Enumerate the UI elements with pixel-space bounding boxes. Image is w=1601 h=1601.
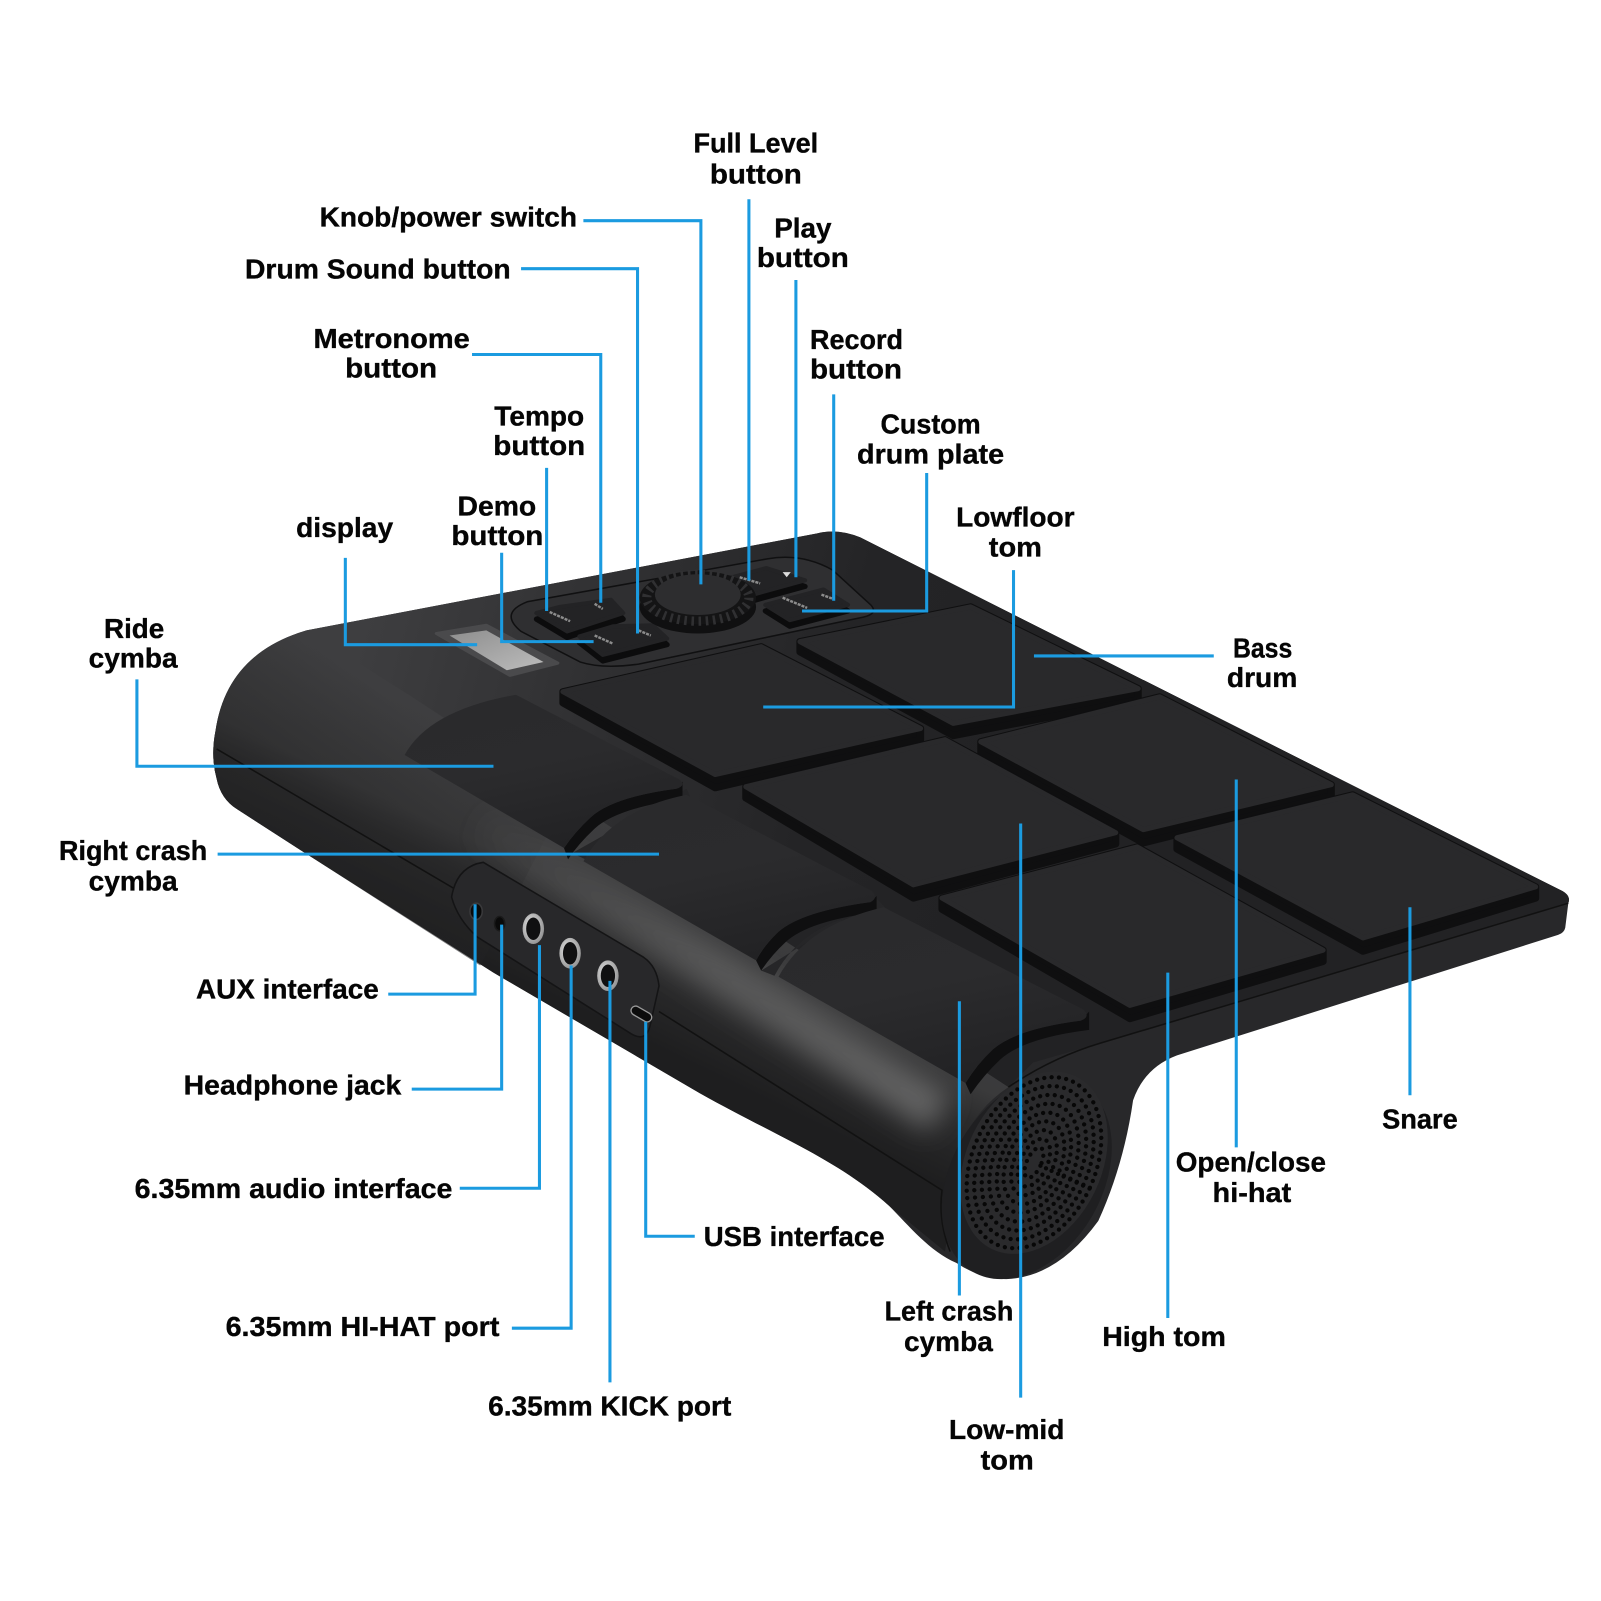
label: low-mid [949, 1414, 1064, 1476]
control panel [511, 557, 874, 666]
line: low-mid [1019, 823, 1022, 1398]
label: tempo: Tempo [494, 401, 584, 432]
label: hi-hat port: 6.35mm HI-HAT port [226, 1311, 499, 1342]
label: demo: button [451, 520, 543, 551]
full level and play button [728, 568, 805, 601]
pad: right crash cymbal [583, 795, 877, 971]
line: left crash [958, 1001, 961, 1296]
label: right crash: cymba [89, 865, 178, 896]
line: knob [583, 221, 701, 584]
line: kick [608, 981, 611, 1382]
leader lines [137, 199, 1410, 1398]
label: ride: cymba [89, 643, 178, 674]
pad: open close hi-hat [981, 697, 1331, 843]
cylinder end shade [213, 630, 572, 966]
label: lowfloor tom: tom [989, 531, 1042, 562]
label: metronome [313, 323, 470, 384]
label: demo: Demo [458, 490, 536, 521]
line: headphone [412, 925, 502, 1089]
label: bass drum [1227, 632, 1297, 693]
label: left crash [885, 1296, 1013, 1357]
labels [59, 128, 1458, 1476]
line: right crash [218, 853, 659, 856]
label: aux: AUX interface [196, 974, 379, 1005]
label: metronome: Metronome [313, 323, 470, 354]
pad: high tom [942, 847, 1323, 1019]
label: record: button [810, 354, 902, 385]
label: kick: 6.35mm KICK port [488, 1391, 731, 1422]
pad: snare [1177, 795, 1536, 951]
label: drum sound: Drum Sound button [245, 253, 511, 284]
line: tempo [545, 468, 548, 611]
label: lowfloor tom [956, 502, 1075, 562]
label: ride: Ride [104, 613, 164, 644]
speaker [907, 1046, 1146, 1310]
label: display: display [296, 512, 394, 543]
label: custom drum plate [857, 409, 1004, 469]
pad: left crash cymbal [779, 907, 1089, 1094]
label: headphone: Headphone jack [184, 1070, 402, 1101]
tempo and metronome buttons [536, 600, 623, 638]
line: ride [137, 679, 493, 766]
line: metronome [472, 355, 601, 603]
label: record: Record [810, 324, 903, 355]
line: display [345, 558, 477, 645]
label: metronome: button [345, 353, 437, 384]
line: lowfloor tom [763, 570, 1014, 707]
label: open close: hi-hat [1213, 1177, 1291, 1208]
body seam [217, 749, 1568, 1252]
label: left crash: cymba [904, 1326, 993, 1357]
label: ride [89, 613, 178, 674]
label: tempo [493, 401, 585, 461]
display [436, 625, 558, 675]
line: demo [502, 553, 594, 642]
label: usb: USB interface [704, 1221, 885, 1252]
label: play: button [757, 242, 849, 273]
label: left crash: Left crash [885, 1296, 1013, 1327]
label: play: Play [774, 213, 832, 244]
highlight band [480, 822, 940, 1114]
line: full level [747, 199, 750, 580]
hi-hat jack [559, 938, 581, 969]
label: knob: Knob/power switch [320, 201, 577, 232]
label: demo [451, 490, 543, 551]
line: play [794, 280, 797, 577]
top plate [307, 532, 1569, 1087]
headphone jack [495, 916, 505, 931]
knob [640, 571, 756, 633]
label: bass drum: Bass [1233, 632, 1292, 663]
line: open close [1235, 780, 1238, 1147]
pad: low-mid tom [746, 740, 1116, 898]
label: custom drum plate: drum plate [857, 438, 1004, 469]
device body silhouette [213, 532, 1569, 1279]
gaps between curved pads [572, 789, 889, 976]
pad: ride cymbal [405, 695, 682, 859]
port panel [452, 862, 659, 1037]
demo and drum sound buttons [579, 625, 667, 661]
line: bass drum [1034, 654, 1214, 657]
label: right crash: Right crash [59, 835, 207, 866]
label: custom drum plate: Custom [880, 409, 981, 440]
line: audio [460, 945, 539, 1188]
label: audio: 6.35mm audio interface [135, 1173, 452, 1204]
label: full level [694, 128, 818, 189]
line: usb [646, 1022, 695, 1236]
line: drum sound [521, 269, 638, 633]
speaker grille [940, 1055, 1128, 1270]
label: lowfloor tom: Lowfloor [956, 502, 1075, 533]
pad: lowfloor tom [563, 647, 921, 788]
label: full level: button [710, 158, 802, 189]
line: high tom [1166, 973, 1169, 1318]
label: open close [1176, 1146, 1326, 1208]
label: open close: Open/close [1176, 1146, 1326, 1177]
line: record [832, 394, 835, 601]
kick jack [597, 960, 619, 991]
label: play [757, 213, 849, 273]
label: bass drum: drum [1227, 662, 1297, 693]
aux jack [470, 903, 482, 920]
label: record [810, 324, 903, 385]
line: snare [1408, 907, 1411, 1095]
line: hi-hat port [512, 966, 571, 1328]
pad: bass drum [800, 607, 1138, 736]
record and custom buttons [765, 590, 848, 626]
label: tempo: button [493, 430, 585, 461]
audio jack [523, 913, 544, 944]
label: low-mid: Low-mid [949, 1414, 1064, 1445]
label: low-mid: tom [981, 1445, 1034, 1476]
usb port [629, 1004, 653, 1024]
line: aux [388, 904, 475, 994]
label: full level: Full Level [694, 128, 818, 159]
label: right crash [59, 835, 207, 896]
line: custom drum plate [802, 473, 927, 611]
drum pad device [213, 532, 1569, 1310]
front cylinder [213, 630, 1008, 1252]
label: high tom: High tom [1102, 1321, 1226, 1352]
label: snare: Snare [1382, 1103, 1458, 1134]
